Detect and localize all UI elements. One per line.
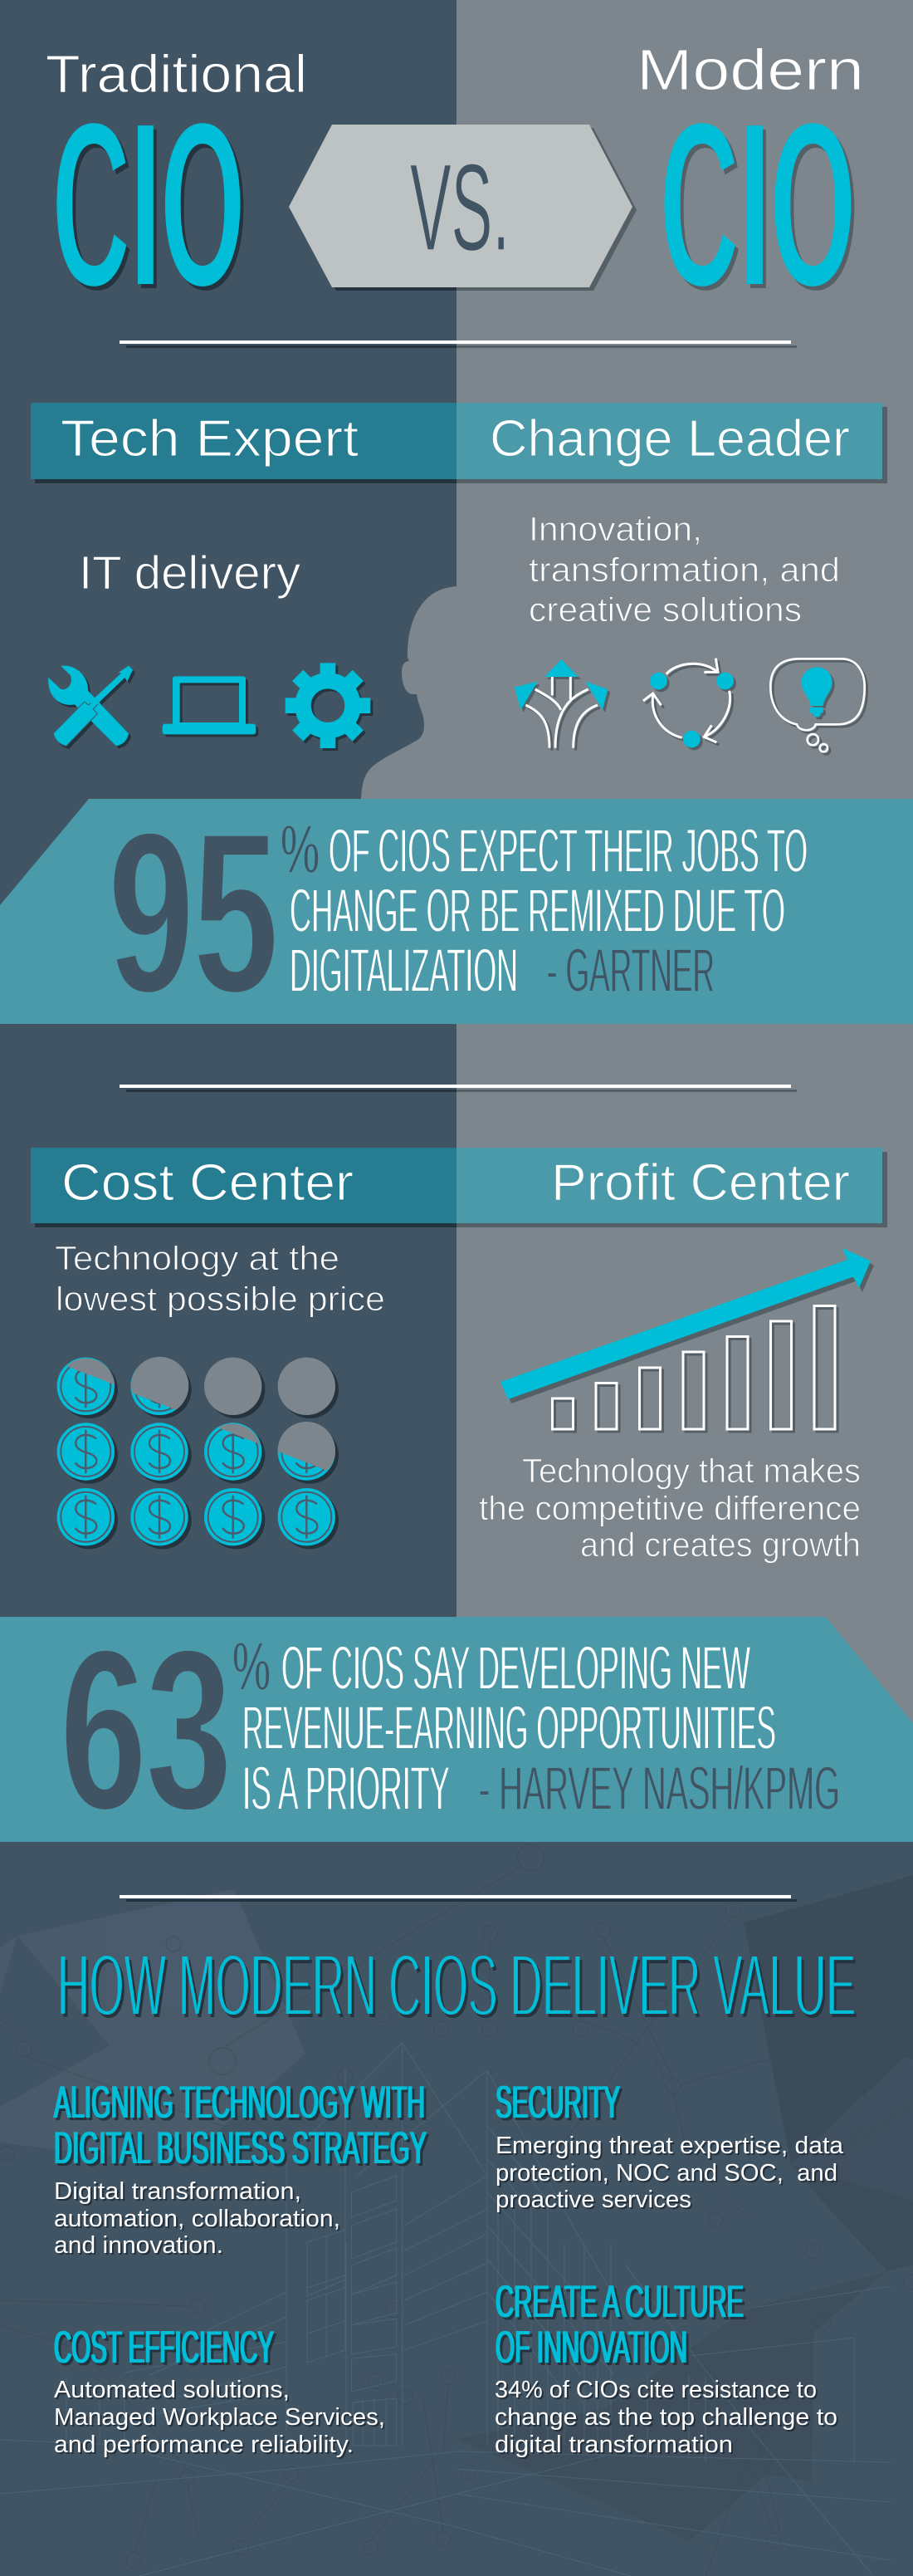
body text xyxy=(496,2133,844,2213)
heading: Modern: Modern xyxy=(637,37,864,102)
icon: cycle of three nodes xyxy=(643,659,734,747)
body text: proactive services xyxy=(496,2187,691,2213)
icon: wrench and screwdriver xyxy=(48,666,133,746)
heading: Create a culture of innovation: OF INNOVATION xyxy=(496,2321,687,2373)
body text: digital transformation xyxy=(495,2432,733,2458)
banner: Tech Expert / Change Leader xyxy=(31,403,887,483)
section: Security xyxy=(496,2076,844,2213)
heading: Aligning technology with digital business strategy: ALIGNING TECHNOLOGY WITH xyxy=(54,2076,425,2128)
body text xyxy=(495,2377,837,2458)
arrow: growth xyxy=(500,1248,871,1399)
text: Innovation, transformation, and creative solutions: creative solutions xyxy=(529,590,802,629)
coin row 3 xyxy=(57,1488,335,1545)
background: dark left panel xyxy=(0,0,456,1842)
icon: laptop xyxy=(163,676,256,734)
text: Technology that makes the competitive difference and creates growth: and creates growth xyxy=(580,1526,861,1564)
body text: Automated solutions, xyxy=(54,2377,290,2403)
text: Technology at the lowest possible price xyxy=(55,1239,385,1318)
heading: Security: SECURITY xyxy=(496,2076,620,2128)
body text: Digital transformation, xyxy=(54,2178,301,2205)
statement text: IS A PRIORITY xyxy=(242,1754,450,1823)
text: Innovation, transformation, and creative solutions: transformation, and xyxy=(529,551,840,589)
network lines xyxy=(0,1844,913,2576)
text: Technology that makes the competitive difference and creates growth: Technology that makes xyxy=(522,1452,861,1490)
text: Technology that makes the competitive difference and creates growth: the competitive difference xyxy=(479,1489,861,1527)
body text xyxy=(54,2377,385,2458)
building wireframe xyxy=(0,2043,891,2576)
chart: rising bars xyxy=(553,1305,835,1429)
text: IT delivery: IT delivery xyxy=(79,546,301,600)
versus hexagon: VS. xyxy=(410,138,510,277)
percent sign: % xyxy=(232,1628,271,1705)
icon: gear xyxy=(286,663,370,748)
heading: Aligning technology with digital business strategy: DIGITAL BUSINESS STRATEGY xyxy=(54,2122,427,2173)
number: 63: 63 xyxy=(61,1600,232,1859)
number: 95: 95 xyxy=(109,783,278,1041)
label: Tech Expert: Tech Expert xyxy=(61,410,359,468)
versus hexagon xyxy=(289,125,637,291)
text: Technology that makes the competitive difference and creates growth xyxy=(479,1452,861,1564)
statement text xyxy=(242,1633,776,1823)
background: gray right panel xyxy=(456,0,913,1842)
chart: dollar coins eroding xyxy=(57,1357,339,1549)
coin row 2 xyxy=(57,1422,335,1481)
bottom section background xyxy=(0,1842,913,2576)
divider 3 xyxy=(120,1895,797,1902)
label: Change Leader: Change Leader xyxy=(490,410,850,468)
icon: thought bubble with light bulb xyxy=(770,659,865,752)
text: CIO xyxy=(52,71,245,339)
body text: change as the top challenge to xyxy=(495,2404,837,2431)
body text: Managed Workplace Services, xyxy=(54,2404,385,2431)
text: Innovation, transformation, and creative solutions xyxy=(529,510,840,629)
body text: protection, NOC and SOC, and xyxy=(496,2160,837,2187)
silhouette of a head and shoulders xyxy=(361,586,456,799)
stat band: 95 percent xyxy=(0,783,913,1041)
stat band: 95 percent: - GARTNER xyxy=(547,936,715,1005)
body text: Emerging threat expertise, data xyxy=(496,2133,844,2159)
statement text: DIGITALIZATION xyxy=(290,936,518,1005)
icon: diverging arrows xyxy=(515,659,608,748)
body text: 34% of CIOs cite resistance to xyxy=(495,2377,817,2403)
body text: and innovation. xyxy=(54,2232,223,2259)
coin row 1 xyxy=(57,1357,335,1415)
heading: Cost efficiency: COST EFFICIENCY xyxy=(54,2321,274,2373)
section: Culture of innovation xyxy=(495,2275,837,2458)
text: Innovation, transformation, and creative solutions: Innovation, xyxy=(529,510,702,548)
section: Cost efficiency xyxy=(54,2321,385,2458)
divider 1 xyxy=(120,340,797,348)
heading: Create a culture of innovation xyxy=(496,2275,744,2373)
label: Cost Center: Cost Center xyxy=(61,1154,354,1212)
percent sign: % xyxy=(281,811,320,888)
heading: Traditional: Traditional xyxy=(46,44,307,104)
divider 2 xyxy=(120,1085,797,1092)
text: Technology at the lowest possible price: lowest possible price xyxy=(56,1280,385,1318)
text: Technology at the lowest possible price: Technology at the xyxy=(55,1239,339,1277)
statement text xyxy=(290,816,808,1005)
stat band: 63 percent xyxy=(0,1600,913,1859)
body text: and performance reliability. xyxy=(54,2432,354,2458)
heading: Aligning technology with digital business strategy xyxy=(54,2076,427,2173)
label: Profit Center: Profit Center xyxy=(551,1154,850,1212)
section: Aligning technology xyxy=(54,2076,427,2259)
body text xyxy=(54,2178,340,2259)
banner: Cost Center / Profit Center xyxy=(31,1148,887,1227)
body text: automation, collaboration, xyxy=(54,2206,340,2232)
